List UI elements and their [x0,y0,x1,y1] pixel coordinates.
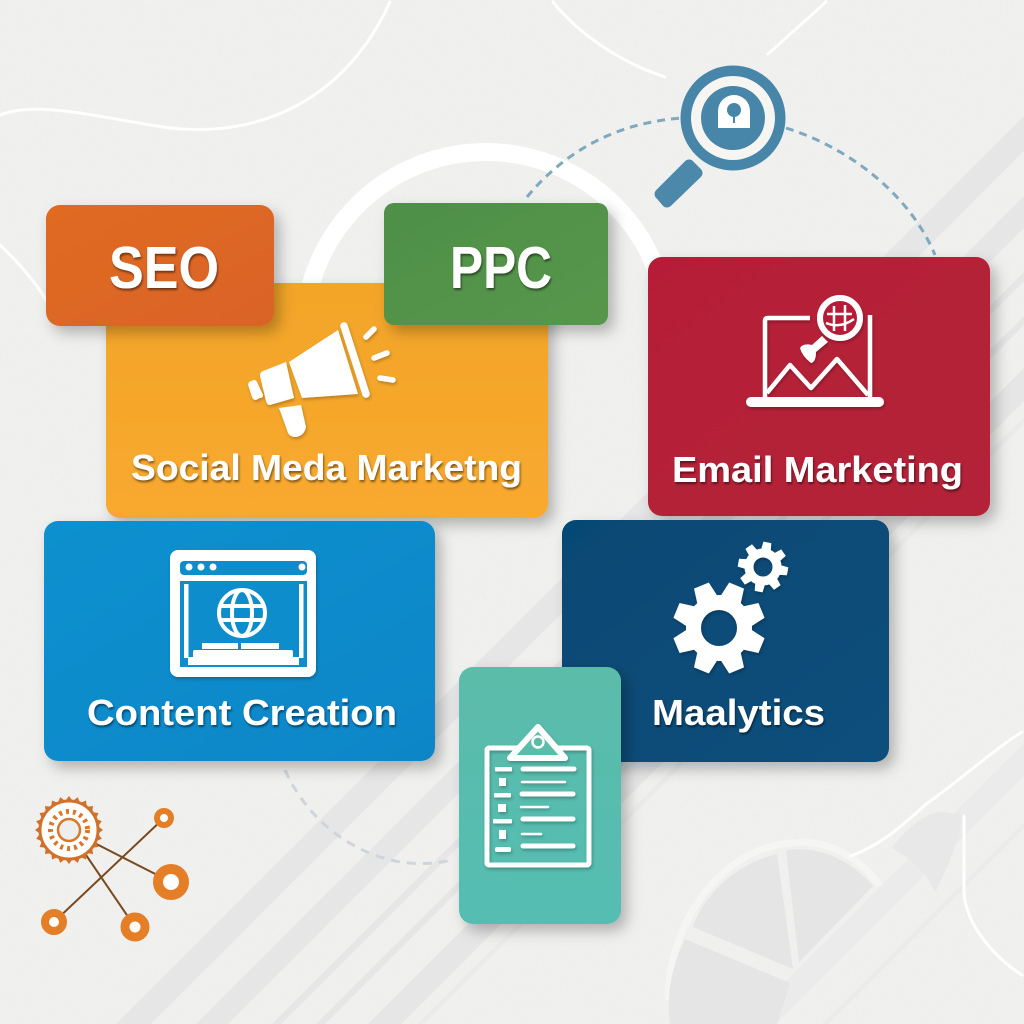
label: analytics: Maalytics [652,692,825,733]
label: SEO: SEO [109,235,219,301]
label: content creation: Content Creation [87,692,397,733]
panel: social media marketing [106,283,548,518]
large white arc [304,152,668,334]
icon: browser window with globe [170,550,316,677]
background diagonal stripes [116,116,1024,1024]
icon: megaphone [248,326,393,437]
label: PPC: PPC [450,235,552,301]
panel: email marketing [648,257,990,516]
label: email marketing: Email Marketing [672,449,963,490]
panel: analytics [562,520,889,762]
icon: clipboard checklist [487,727,589,865]
icon: orange network with gear [35,796,184,937]
panel: SEO [46,205,274,326]
label: social media marketing: Social Meda Marketng [131,447,522,488]
panel: content creation [44,521,435,761]
panel: teal clipboard card [459,667,621,924]
background pie chart watermark [668,812,962,1024]
icon: magnifying glass with lock [660,66,786,202]
dashed orbit upper [527,118,935,255]
icon: screen with globe pin [746,298,884,407]
icon: gears [672,542,788,675]
panel: PPC [384,203,608,325]
dashed orbit lower [285,770,452,864]
